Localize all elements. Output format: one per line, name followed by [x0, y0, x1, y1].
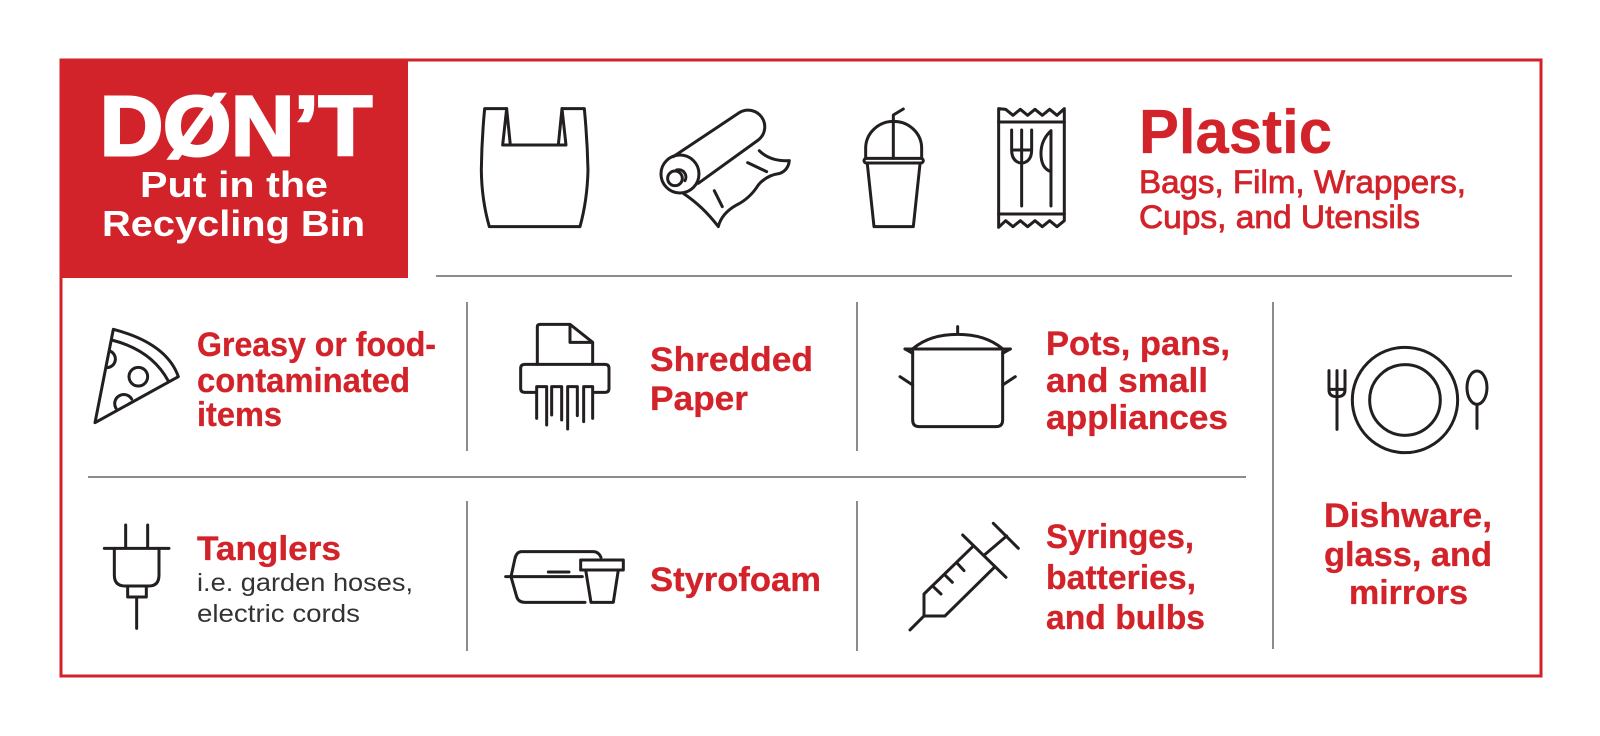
icon: foam container and cup	[506, 552, 623, 602]
icon: paper shredder	[521, 324, 609, 429]
icon: syringe	[910, 523, 1018, 630]
icon: plate, fork and spoon	[1329, 347, 1487, 453]
panel: syringes	[910, 518, 1205, 637]
label: syringes: and bulbs	[1046, 599, 1205, 637]
label: greasy: Greasy or food-	[197, 326, 436, 364]
icon: pot	[900, 327, 1015, 427]
subheading: recycling bin: Recycling Bin	[102, 203, 365, 244]
icon: plug	[104, 525, 169, 628]
icon: pizza slice	[95, 329, 178, 423]
panel: pots and pans	[900, 325, 1230, 437]
label: syringes: batteries,	[1046, 559, 1196, 597]
icon: film roll	[661, 110, 789, 227]
panel: dishware	[1324, 347, 1492, 612]
panel: plastic	[481, 98, 1466, 235]
label: pots: and small	[1046, 362, 1208, 400]
panel: styrofoam	[506, 552, 821, 602]
panel: shredded paper	[521, 324, 813, 429]
label: dishware: mirrors	[1349, 574, 1468, 612]
tanglers detail: electric cords	[197, 600, 360, 628]
label: syringes: Syringes,	[1046, 518, 1194, 556]
heading: don't: DØN’T	[100, 79, 372, 173]
icon: cup with straw	[864, 109, 923, 227]
subheading: put in the: Put in the	[140, 164, 328, 205]
label: shredded paper: Shredded	[650, 341, 813, 379]
label: greasy: items	[197, 396, 282, 434]
label: pots: appliances	[1046, 399, 1228, 437]
label: shredded paper: Paper	[650, 380, 748, 418]
label: styrofoam: Styrofoam	[650, 561, 821, 599]
label: dishware: Dishware,	[1324, 497, 1492, 535]
plastic detail line 2: Cups, and Utensils	[1139, 199, 1420, 235]
icon: wrapped utensils	[999, 109, 1064, 227]
label: greasy: contaminated	[197, 362, 410, 400]
label: pots: Pots, pans,	[1046, 325, 1230, 363]
icon: plastic bag	[481, 109, 588, 227]
label: tanglers: Tanglers	[197, 530, 341, 568]
plastic title: Plastic	[1139, 98, 1332, 167]
panel: tanglers	[104, 525, 413, 628]
label: dishware: glass, and	[1324, 536, 1492, 574]
panel: greasy items	[95, 326, 436, 434]
panel: header	[60, 59, 408, 278]
tanglers detail: i.e. garden hoses,	[197, 569, 413, 597]
plastic detail line 1: Bags, Film, Wrappers,	[1139, 164, 1466, 200]
outer red frame	[61, 60, 1541, 676]
